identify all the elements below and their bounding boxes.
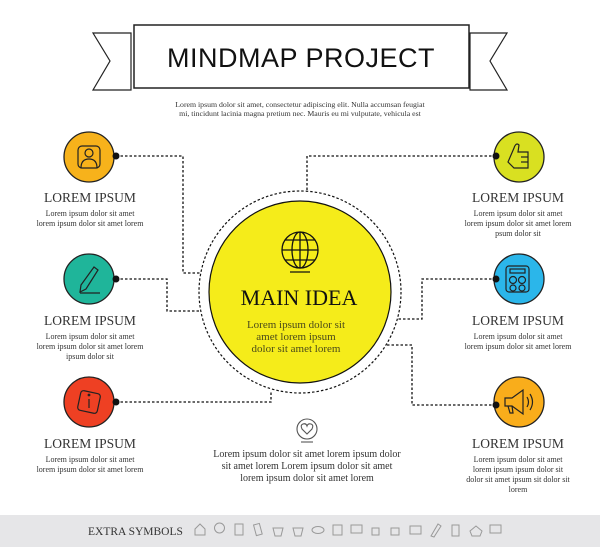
- icon: heart badge: [297, 419, 317, 442]
- node: right 3: LOREM IPSUM: [472, 436, 564, 451]
- node: left 2: LOREM IPSUM: [44, 313, 136, 328]
- node: left 1: [37, 132, 144, 228]
- node: right 3: lorem ipsum ipsum dolor sit: [473, 465, 564, 474]
- main idea: [199, 191, 401, 393]
- node: right 1: psum dolor sit: [495, 229, 542, 238]
- main idea: Lorem ipsum dolor sit: [247, 319, 345, 331]
- icon: globe: [282, 232, 318, 272]
- footer: extra symbols: EXTRA SYMBOLS: [88, 526, 183, 538]
- node: right 1: lorem ipsum dolor sit amet lorem: [465, 219, 572, 228]
- node: left 3: Lorem ipsum dolor sit amet: [46, 455, 135, 464]
- bottom text: [213, 449, 401, 484]
- main idea: amet lorem ipsum: [256, 331, 336, 343]
- title banner: MINDMAP PROJECT: [167, 43, 435, 73]
- subtitle: mi, tincidunt lacinia magna pretium nec. Mauris eu mi vulputate, vehicula est: [179, 109, 422, 118]
- subtitle: Lorem ipsum dolor sit amet, consectetur adipiscing elit. Nulla accumsan feugiat: [175, 100, 426, 109]
- node: right 2: lorem ipsum dolor sit amet lorem: [465, 342, 572, 351]
- node: left 2: [37, 254, 144, 361]
- icon: megaphone: [505, 390, 532, 414]
- node: right 2: [465, 254, 572, 351]
- node: left 2: ipsum dolor sit: [66, 352, 115, 361]
- icon: calculator: [506, 266, 529, 292]
- main idea: MAIN IDEA: [241, 285, 357, 310]
- node: left 3: [37, 377, 144, 474]
- icon: person: [78, 146, 100, 168]
- node: right 1: Lorem ipsum dolor sit amet: [474, 209, 563, 218]
- node: left 3: lorem ipsum dolor sit amet lorem: [37, 465, 144, 474]
- node: left 1: LOREM IPSUM: [44, 190, 136, 205]
- node: right 3: [466, 377, 571, 494]
- main idea: dolor sit amet lorem: [252, 343, 341, 355]
- node: right 1: LOREM IPSUM: [472, 190, 564, 205]
- node: right 3: dolor sit amet ipsum sit dolor sit: [466, 475, 571, 484]
- bottom text: lorem ipsum dolor sit amet lorem: [240, 473, 374, 484]
- title banner: [93, 25, 507, 90]
- icon: pencil: [80, 267, 100, 293]
- subtitle: [175, 100, 426, 118]
- node: right 2: Lorem ipsum dolor sit amet: [474, 332, 563, 341]
- node: left 2: lorem ipsum dolor sit amet lorem: [37, 342, 144, 351]
- node: left 1: lorem ipsum dolor sit amet lorem: [37, 219, 144, 228]
- node: left 2: Lorem ipsum dolor sit amet: [46, 332, 135, 341]
- node: right 3: Lorem ipsum dolor sit amet: [474, 455, 563, 464]
- connectors: [116, 156, 496, 405]
- icon: thumbs up: [508, 144, 528, 168]
- node: right 3: lorem: [509, 485, 528, 494]
- bottom text: sit amet lorem Lorem ipsum dolor sit amet: [222, 461, 393, 472]
- node: right 1: [465, 132, 572, 238]
- node: left 1: Lorem ipsum dolor sit amet: [46, 209, 135, 218]
- node: left 3: LOREM IPSUM: [44, 436, 136, 451]
- icon: info: [77, 390, 101, 414]
- node: right 2: LOREM IPSUM: [472, 313, 564, 328]
- bottom text: Lorem ipsum dolor sit amet lorem ipsum dolor: [213, 449, 401, 460]
- footer: extra symbols: [0, 515, 600, 547]
